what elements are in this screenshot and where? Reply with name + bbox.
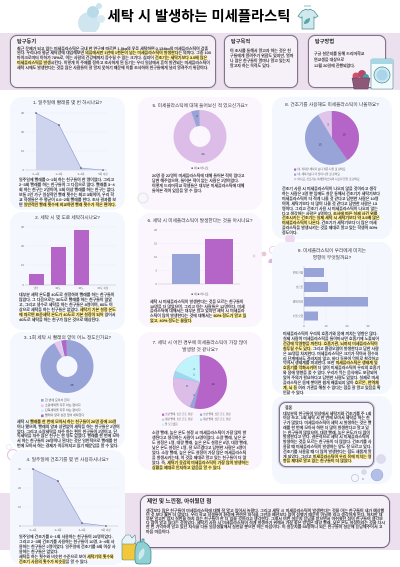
area chart 1: 2~3회	[56, 172, 63, 176]
donut chart 5: 24	[202, 152, 205, 156]
text: card 6 analysis: 세탁 시 미세플라스틱이 발생한다는 것을 모르는 친구들이 18명을 더 많았으며, 그리고 아는 사람들은 12명이다. 미세플라스틱에 대해서는 대부분 알고 있지만 세탁 시 미세플라스틱이 많이 발생한다는 것에 대해서는 60% 정도가 알고 있었고, 40% 정도는 몰랐다.	[150, 299, 246, 323]
pie chart 7: 14	[212, 382, 215, 386]
card: 결론 background	[272, 396, 392, 484]
icon: ring bubble	[138, 192, 148, 204]
text: method: 연교생을 대상으로	[314, 57, 344, 62]
text: method	[314, 51, 364, 68]
area chart 4: 5회 이상	[101, 528, 111, 532]
text: card 8 analysis: 건조기 사용 시 미세플라스틱이 나오지 않을 것이라고 생각하는 사람은 3명 뿐 임에도 설문 통해서 건조기가 세탁기보다 미세플라스틱이 더 적게 나올 것 같다고 답변한 사람은 10명이며, 세탁기보다 더 많이 나올 것 같다고 답변한 사람은 13명이다. 그리고 건조기 사용 시 미세플라스틱이 나오지 않는다고 생각하는 사람은 3명이다. 조사에 따른 실제 사건 위를 건조시키는 건조기는 실제 세탁 시 세탁기보다 약 3.5배 많은 미세플라스틱이 나온다. 건조기가 세탁기보다 더 많은 미세플라스틱을 발생시키는 것을 제대로 알고 있는 학생이 50%정도이다.	[282, 186, 380, 235]
card 5: awareness	[138, 97, 262, 210]
area chart 1: 20	[21, 130, 25, 134]
question 8: 8. 건조기를 사용해도 미세플라스틱이 나올까요?	[285, 102, 379, 106]
panel: 탐구방법	[308, 35, 386, 88]
card 2: wash temperature	[10, 212, 125, 330]
card 4: dryer frequency	[10, 450, 125, 565]
horizontal bar chart 9: 생태 파괴	[293, 300, 304, 304]
icon: detergent and bottle	[122, 534, 152, 564]
bar chart 6: 0	[156, 282, 158, 286]
pie chart 7: 4	[193, 367, 195, 371]
icon: title bubbles	[78, 3, 105, 32]
heading: 탐구동기: 탐구동기	[17, 39, 36, 45]
area chart 1: 30	[21, 111, 25, 115]
area chart 1: 10	[21, 149, 25, 153]
area chart 4: 0	[20, 524, 22, 528]
horizontal bar chart 9: 인체 기형	[293, 270, 304, 274]
text: card 5 analysis: 20명 중 22명이 미세플라스틱에 대해 들어본 적이 있다고 답변 해주었으며, 들어본 적이 없는 사람은 2명이었다.	[152, 172, 244, 182]
question 6: 6. 세탁 시 미세플라스틱이 발생한다는 것을 아시나요?	[148, 218, 252, 222]
panel: 제언 및 느낀점	[140, 495, 390, 548]
horizontal bar chart 9: 30	[367, 324, 370, 328]
card 3: laundry amount	[10, 332, 125, 448]
horizontal bar chart 9	[292, 266, 370, 328]
legend: card 8: 네, 적지만 세탁기 보다 적은 나올 것 같아요	[298, 168, 346, 171]
card 8: dryer and microplastics	[272, 97, 392, 239]
donut chart 5: 2	[196, 114, 198, 118]
legend: card 3: 빨래의 양과 상관 없이 세탁한다	[45, 413, 84, 417]
question 1: 1. 일주일에 빨래를 몇 번 하시나요?	[33, 100, 102, 105]
question 4: 4. 일주일에 건조기를 몇 번 사용하시나요?	[26, 456, 109, 462]
text: motivation: 최근 문제가 되고 있는 미세플라스틱은 국내 한 연구에 따르면 1.5kg의 옷을 세탁하면 0.134kg의 미세플라스틱이 검출된다. 우리나라 평균 세탁량에 대입해보면 의류에서만 1년에 1천톤이 넘는 미세플라스틱이 발생한다는 의미다. 그중 100마이크로미터 이하가 78%로, 이는 사람의 건강에까지 증수될 수 있는 크기다. 심지어 건조기는 세탁기보다 3.5배 많은 미세플라스틱을 발생시킨다. 이렇게 이 주제를 정하고 조사하게 된 동기는 우리 일상에서 흔히 발견되는 미세플라스틱이 세탁 시에도 발생한다는 것을 많은 사람들이 잘 알지 못하기 때문에 이를 조사하여 친구들에게 널리 알려주기 위함이다.	[17, 46, 211, 70]
legend: card 7: 잘 모르겠음	[165, 423, 178, 426]
bar chart 2: 10	[21, 263, 25, 267]
pie chart 7: 1	[193, 393, 195, 397]
pie chart 8: 10	[343, 132, 346, 136]
bar chart 2: 60도 이상	[98, 286, 109, 290]
text: card 1 analysis: 일주일에 빨래를 0~1회 하는 친구들이 한 명이었다. 그리고 2~3회 빨래를 하는 친구들이 그 다음으로 많다. 빨래를 3~4회 하는 친구는 2명이며, 5회 이상 빨래를 하는 친구는 없다. 보통 2인 가구 일상적인 빨래 횟수는 최고 3회이며, 우리 학교 학생들은 주 평균이 0.5~2회 빨래를 한다. 조사 결과를 보면 일반적인 빨래 횟수에 비교하면 빨래 횟수가 적은 편이다.	[19, 176, 116, 206]
icon: bubbles middle	[252, 252, 270, 263]
legend: card 3: 한 번에 모아서 한다	[45, 398, 70, 402]
icon: bubbles above card 9	[268, 235, 295, 264]
background band: bottom	[0, 493, 400, 550]
text: conclusion: 대부분의 친구들이 일상에서 세탁기와 건조기를 주 1회 이상 쓰고, 1회 세탁 시 한 번에 모아서 세탁을 하는 친구가 많았다. 미세플라스틱이 세탁 시 발생하는 것은 빨래를 한 번에 모아서 하면 더 많이 발생한다고 알고 있는 친구들이 많았으며, 대량 빨래, 높은 온도가 더 많이 발생한다고 안다. 결론적으로 세탁 시 미세플라스틱이 발생하는 것을 모르는 친구들이 더 많았다. 건조기를 사용할 때 미세플라스틱이 발생하는 양도 잘 모르고 있다. 건조기를 사용할 때 더 많이 발생한다는 점도 새롭게 알게 되었다. 그리고 미세플라스틱이 우리 몸에 미치는 영향을 제대로 알고 있는 친구들이 더 많았다.	[283, 410, 371, 463]
icon: laundry basket	[352, 70, 370, 90]
pie chart 8: 13	[319, 142, 322, 146]
pie chart 7: 6	[186, 384, 188, 388]
question 9: 9. 미세플라스틱이 우리에게 미치는 영향이 무엇일까요?	[298, 248, 366, 260]
area chart 1	[21, 111, 108, 176]
bar chart 2: 냉수	[34, 286, 39, 290]
text: method: 12월 20일에 진행되었다.	[314, 63, 355, 68]
text: card 2 analysis: 대부분 세탁 온도를 40도로 설정하여 빨래를 하는 친구들이 많았다. 그 다음으로는 30도로 빨래를 하는 친구들이 많았고, 그리고 냉수로 세탁을 하는 친구들은 8명이며, 60도 이상으로 세탁을 하는 친구들은 없었다. 세탁기 기본 설정 온도에 따르면 표준세탁 온도가 40도로 기본 설정이 되어 있어서 40도로 세탁을 하는 친구가 많은 것으로 예상된다.	[19, 292, 116, 322]
text: suggestions: 생각보다 많은 친구들이 미세플라스틱에 대해 잘 알고 있어서 놀랐다. 그리고 세탁 시 미세플라스틱이 발생한다는 것을 아는 친구들이 내가 예상했던 것 보다 훨씬 더 많았다. 우리 학교 학생들이 환경에 관련된 지식을 그만큼 예전보다 많이 접했기 때문이 아닐까 라고 생각하게 된다. 하지만 대부분 알고만 있지 실천을 하지 않는 친구들이 한 더 있을 것이라고 생각한다. 그래서 이번 설문지 응답을 받으면서 아쉬웠던 점이 친구들이 생각보다 많이 알고 있다는 것이었다. 세탁기 사용 시 미세플라스틱이 적게 발생하기 위해서 가장 좋은 방법은 대량 빨래, 낮은 온도 설정이라는 것을 다시 한 번 기억하여 알고 있던 지식을 다들 일상생활에서 실천할 뿐으면 하는 마음이다. 이 설문지를 55명이나 되는 친구들이 설문에 응답해주어서 고마움 마음이다.	[146, 508, 385, 534]
bar chart 2: 30도	[55, 286, 61, 290]
icon: bubbles left	[6, 444, 26, 460]
card 1: laundry frequency	[10, 97, 125, 210]
text: purpose: 이 조사를 통해서 알고자 하는 것은 친구들에게 알려주기 위함도 있지만, 얼마나 많은 친구들이 얼마나 알고 있는지 알고자 하는 목적도 있다.	[230, 48, 293, 68]
question 3: 3. 1회 세탁 시 빨래의 양이 어느 정도인가요?	[24, 334, 111, 340]
legend: card 7: 소량 빨래, 높은 온도 설정	[165, 413, 192, 416]
heading: 결론: 결론	[285, 405, 292, 410]
area chart 1: 5회 이상	[98, 172, 108, 176]
icon: t-shirt	[298, 6, 318, 30]
legend: card 3: 소량세탁을 자주 하는 편이다	[45, 403, 81, 407]
horizontal bar chart 9: 10	[325, 324, 328, 328]
legend: card 3: 단독세탁을 자주 하는 편이다	[45, 408, 81, 412]
icon: bubbles lower right	[351, 454, 386, 482]
bar chart 2: 20	[21, 244, 25, 248]
legend: card 5: ■ 네 ■ 아니오	[191, 166, 209, 170]
legend: card 7: 소량 빨래, 낮은 온도 설정	[203, 413, 230, 416]
area chart 1: 3~4회	[78, 172, 85, 176]
legend: card 8: 네, 세탁기보다 더 많이 나올 것 같아요	[298, 173, 340, 176]
text: card 7 analysis: 소량 빨래, 높은 온도 설정 시 미세플라스틱이 가장 많이 발생된다고 생각하는 사람이 14명이었다. 소량 빨래, 낮은 온도 설정은 1명, 대량 빨래, 높은 온도 설정은 6명, 대량 빨래, 낮은 온도 설정은 1명, 잘 모르겠다고 답변한 사람은 4명이었다. 소량 빨래, 높은 온도 설정이 가장 많은 미세플라스틱을 발생시키는데, 이 것을 제대로 알고 있는 친구들이 더 많았다. 즉, 세탁기 옷감의 미세플라스틱이 가장 많이 발생하는 상황을 제대로 인지하고 있음을 알 수 있다.	[152, 430, 249, 470]
legend: card 7: 대량 빨래, 낮은 온도 설정	[203, 418, 230, 421]
icon: washing machine	[370, 58, 394, 90]
legend: card 8: 아니요, 건조기는 미세플라스틱이 나오지 않을 것 같아요	[298, 178, 360, 180]
area chart 4: 30	[18, 467, 22, 471]
pie chart 8: 3	[327, 122, 329, 126]
title: 세탁 시 발생하는 미세플라스틱	[108, 9, 290, 25]
card 6: awareness of generation	[138, 213, 262, 327]
question 2: 2. 세탁 시 몇 도로 세탁하시나요?	[35, 215, 100, 220]
card 7: when most generated	[138, 332, 262, 470]
card 9: effects	[272, 242, 392, 394]
pie chart 7: 1	[193, 372, 195, 376]
donut chart 3	[40, 340, 94, 393]
horizontal bar chart 9: 호르몬	[296, 285, 304, 289]
heading: 탐구방법: 탐구방법	[315, 39, 334, 45]
area chart 4: 3~4회	[79, 528, 86, 532]
question 7: 7. 세탁 시 어떤 경우에 미세플라스틱이 가장 많이 발생할 것 같나요?	[153, 340, 247, 352]
area chart 1: 0	[23, 168, 25, 172]
text: method: 구글 설문지를 통해 드리머학교	[314, 51, 364, 56]
text: card 4 analysis: 세탁을 하는 횟수와 비슷한 수준으로 보아 세탁기의 횟수와 건조기 사용의 횟수가 비슷함을 알 수 있다.	[19, 554, 114, 564]
panel: 결론	[279, 402, 374, 467]
legend: card 7	[162, 412, 230, 426]
donut chart 3: 26	[71, 383, 74, 387]
horizontal bar chart 9: 0	[303, 324, 305, 328]
bar chart 6: 5	[156, 268, 158, 272]
area chart 4: 0~1회	[30, 528, 37, 532]
area chart 4	[18, 467, 118, 532]
text: card 4 analysis: 일주일에 건조기를 0~1회 사용하는 친구들이 20명이었다. 그리고 2~3회 건조기를 사용하는 친구들이 10명, 3~4회 사용하는 친구들은 2명이었다. 일주일에 건조기를 5회 이상 사용하는 친구들은 없었다.	[19, 534, 115, 554]
heading: 탐구목적: 탐구목적	[231, 39, 250, 45]
heading: 제언 및 느낀점: 제언 및 느낀점, 아쉬웠던 점	[147, 498, 211, 504]
bar chart 6	[154, 228, 240, 286]
area chart 4: 20	[18, 486, 22, 490]
bar chart 2: 0	[23, 283, 25, 287]
area chart 1: 0~1회	[33, 172, 40, 176]
legend: card 6: ■ 네 ■ 아니오	[191, 292, 209, 296]
horizontal bar chart 9: 수질 오염	[293, 314, 304, 318]
legend: card 3	[41, 398, 84, 418]
background band: top	[0, 33, 400, 90]
legend: card 7: 대량 빨래, 높은 온도 설정	[165, 418, 192, 421]
question 5: 5. 미세플라스틱에 대해 들어보신 적 있으신가요?	[153, 102, 247, 108]
pie chart 8	[305, 111, 359, 165]
bar chart 6: 10	[154, 255, 158, 259]
text: card 5 analysis	[152, 172, 244, 193]
panel: 탐구동기	[10, 35, 216, 88]
panel: 탐구목적	[224, 35, 298, 88]
bar chart 2: 40도	[78, 286, 84, 290]
bar chart 2	[21, 225, 116, 290]
legend: card 8	[294, 167, 360, 181]
bar chart 6: 20	[154, 228, 158, 232]
donut chart 5	[174, 110, 226, 163]
horizontal bar chart 9: 20	[346, 324, 349, 328]
area chart 4: 10	[18, 505, 22, 509]
pie chart 7	[173, 355, 227, 409]
text: card 3 analysis: 세탁 시 빨래를 한 번에 모아서 하는 친구들이 26명 중에 20명 이나 됐으며, 빨래의 양과 상관없이 세탁을 하는 친구들은 2명이었다. 그리고 소량세탁을 자주 하는 편인 친구들이 2명이고, 단독세탁을 자주 많은 친구는 한 명도 없었다. 빨래를 한 번에 모아서 하는 친구들이 26명이나 된다는 것은 일반적으로 빨래를 한 번에 모아서 하는 경제가 이루어지고 있기 때문임을 알 수 있다.	[17, 419, 120, 448]
text: card 5 analysis: 이렇게 드리머학교 학생들은 대부분 미세플라스틱에 대해 들어본 적이 있음을 알 수 있다.	[152, 182, 244, 192]
text: card 9 analysis: 미세플라스틱이 우리의 호흡기와 몸에 끼치는 영향은 많다. 실제 사람이 미세플라스틱을 들이마시면 호흡기에 노출되어 건강에 악영향을 끼친다. 호흡기관, 뇌까지 미세플라스틱이 침투될 수도 있다. 그리고 환경오염이 발생한다고 답한 사람은 30명을 차지한다. 미세플라스틱은 크기가 작아서 정수처리 단계에서도 걸러지지 않고, 바다 동물이 먹이로 착각하고 먹어서 생태계를 파괴한다. 또한 미세플라스틱은 생태계 및 호흡기를 악화시키며 더 많이 미세플라스틱이 우리의 호흡기와 몸에 영향을 줄 수 있다. 우리가 먹는 음식에도 포함되어 있어 주의가 필요하다고 답변한 사람도 있었다. 실제로 미세플라스틱은 몸에 쌓이면 쉽게 배출되지 않아 호르몬, 면역체계, 뇌 등 여러 기관을 해칠 수 있다는 점을 잘 알고 있음을 확인할 수 있다.	[283, 331, 381, 395]
area chart 4: 2~3회	[55, 528, 62, 532]
text: card 4 analysis	[19, 534, 116, 564]
bar chart 2: 30	[21, 225, 25, 229]
bar chart 6: 15	[154, 242, 158, 246]
